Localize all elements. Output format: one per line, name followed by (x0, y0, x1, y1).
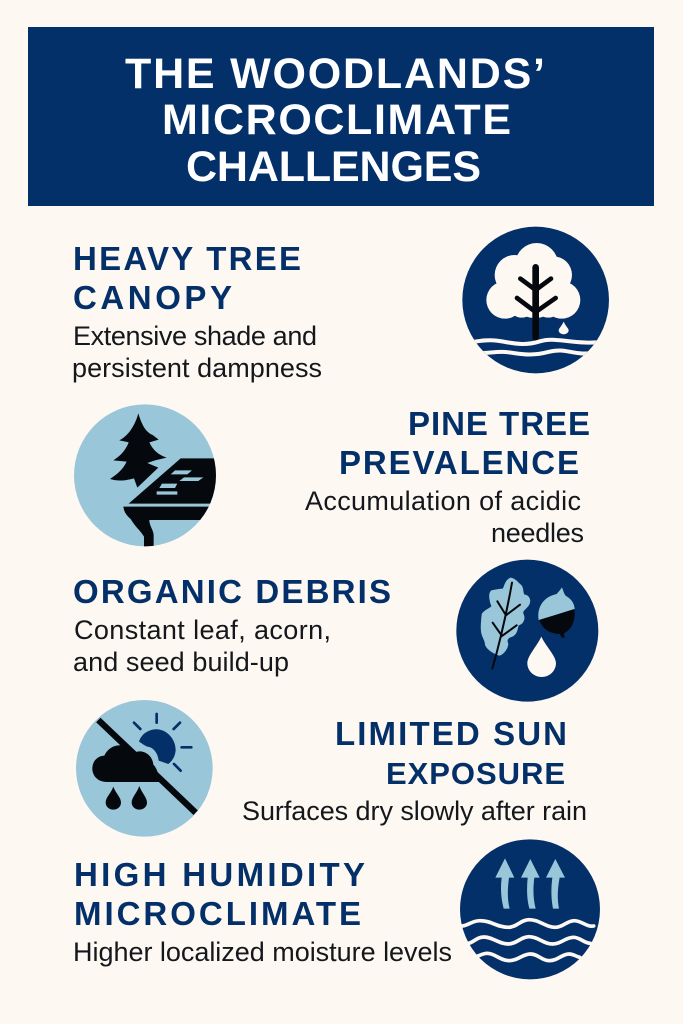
heading: high humidity microclimate (74, 856, 365, 932)
panel: high humidity microclimate (73, 839, 600, 979)
heading: heavy tree canopy (73, 240, 301, 316)
text: pine tree prevalence description: needles (491, 518, 584, 548)
text: pine tree prevalence description (305, 486, 584, 548)
text: pine tree prevalence description: Accumulation of acidic (305, 486, 581, 516)
water drop (527, 637, 556, 677)
sun (134, 714, 191, 771)
heading: high humidity microclimate: HIGH HUMIDITY (74, 856, 365, 893)
heading: organic debris: ORGANIC DEBRIS (73, 573, 391, 610)
slash (98, 720, 196, 813)
cloud (92, 745, 161, 782)
heading: pine tree prevalence: PINE TREE (408, 405, 590, 442)
icon: tree over water (460, 227, 610, 373)
panel: organic debris (73, 560, 598, 702)
heading: limited sun exposure: EXPOSURE (386, 756, 565, 791)
oak leaf (482, 579, 529, 669)
panel: heavy tree canopy (72, 227, 610, 383)
heading: pine tree prevalence (339, 405, 590, 481)
heading: heavy tree canopy: CANOPY (73, 279, 232, 316)
text: limited sun exposure description: Surfaces dry slowly after rain (242, 796, 587, 826)
text: heavy tree canopy description: persistent dampness (72, 353, 322, 383)
panel: limited sun exposure (76, 700, 587, 837)
title (125, 50, 545, 191)
rain drops (106, 786, 147, 810)
title: MICROCLIMATE (162, 96, 511, 144)
heading: high humidity microclimate: MICROCLIMATE (74, 895, 361, 932)
heading: heavy tree canopy: HEAVY TREE (73, 240, 301, 277)
acorn (538, 587, 575, 638)
icon: leaf, acorn and drop (456, 560, 598, 702)
title: CHALLENGES (186, 143, 481, 191)
text: organic debris description (73, 615, 331, 677)
panel: pine tree prevalence (74, 404, 590, 552)
heading: limited sun exposure: LIMITED SUN (335, 715, 567, 752)
title banner (28, 27, 654, 206)
text: heavy tree canopy description (72, 321, 322, 383)
heading: pine tree prevalence: PREVALENCE (339, 444, 579, 481)
text: organic debris description: Constant leaf, acorn, (74, 615, 331, 645)
text: heavy tree canopy description: Extensive shade and (73, 321, 317, 351)
title: THE WOODLANDS’ (125, 50, 545, 98)
text: organic debris description: and seed build-up (73, 647, 289, 677)
text: high humidity description: Higher localized moisture levels (73, 937, 452, 967)
icon: rising vapor over water (460, 839, 600, 979)
icon: pine tree and gutter (74, 404, 220, 552)
icon: cloud, sun and slash (76, 700, 213, 837)
heading: limited sun exposure (335, 715, 567, 791)
